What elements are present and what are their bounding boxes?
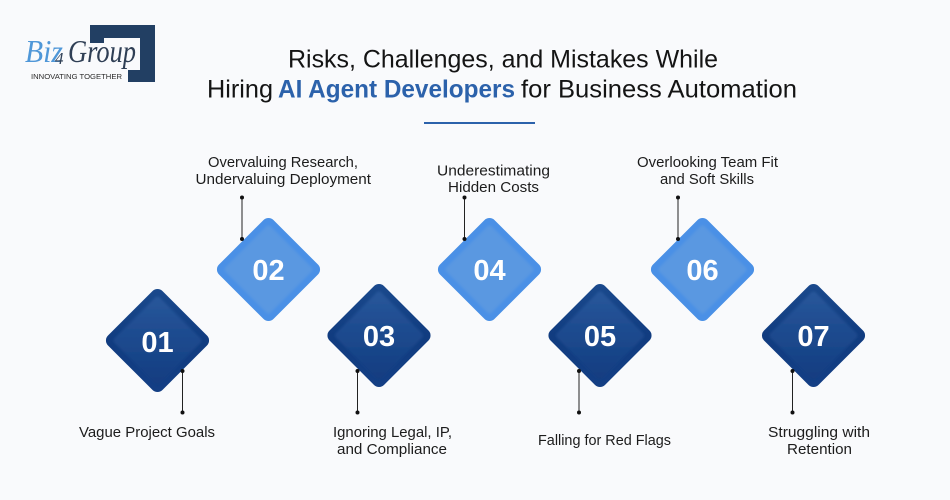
step 06: Overlooking Team Fit and Soft Skills: 06: [686, 255, 719, 287]
step 06: Overlooking Team Fit and Soft Skills: and Soft Skills: [660, 172, 754, 188]
title: for Business Automation: [521, 76, 797, 104]
step 03: Ignoring Legal, IP, and Compliance: 03: [363, 321, 395, 353]
step 05: Falling for Red Flags: Falling for Red Flags: [538, 433, 671, 449]
step 03: Ignoring Legal, IP, and Compliance: [325, 281, 452, 458]
step 01: Vague Project Goals: [79, 286, 215, 441]
step 05: Falling for Red Flags: [538, 281, 671, 449]
step 02: Overvaluing Research, Undervaluing Deployment: [196, 155, 371, 324]
step 07: Struggling with Retention: [759, 281, 870, 458]
step 07: Struggling with Retention: Struggling with: [768, 425, 870, 441]
step 04: Underestimating Hidden Costs: Underestimating: [437, 164, 550, 180]
step 06: Overlooking Team Fit and Soft Skills: [637, 155, 778, 324]
title: [207, 46, 797, 104]
title: Risks, Challenges, and Mistakes While: [288, 46, 718, 74]
logo: Biz4Group: Group: [68, 33, 136, 69]
step 06: Overlooking Team Fit and Soft Skills: Overlooking Team Fit: [637, 155, 778, 171]
step 01: Vague Project Goals: 01: [141, 327, 174, 359]
step 04: Underestimating Hidden Costs: [435, 164, 550, 324]
logo: Biz4Group: 4: [55, 49, 64, 68]
logo: Biz4Group: INNOVATING TOGETHER: [31, 72, 123, 81]
step 04: Underestimating Hidden Costs: 04: [473, 255, 506, 287]
title underline: [424, 122, 535, 124]
logo: Biz4Group: [25, 25, 155, 82]
logo: Biz4Group: Biz: [25, 33, 64, 69]
step 07: Struggling with Retention: 07: [797, 321, 830, 353]
step 05: Falling for Red Flags: 05: [584, 321, 616, 353]
step 02: Overvaluing Research, Undervaluing Deployment: Overvaluing Research,: [208, 155, 358, 171]
step 02: Overvaluing Research, Undervaluing Deployment: 02: [252, 255, 285, 287]
title: Hiring: [207, 76, 273, 104]
step 03: Ignoring Legal, IP, and Compliance: and Compliance: [337, 442, 447, 458]
step 07: Struggling with Retention: Retention: [787, 442, 852, 458]
step 01: Vague Project Goals: Vague Project Goals: [79, 425, 215, 441]
step 02: Overvaluing Research, Undervaluing Deployment: Undervaluing Deployment: [196, 172, 371, 188]
step 04: Underestimating Hidden Costs: Hidden Costs: [448, 180, 539, 196]
step 03: Ignoring Legal, IP, and Compliance: Ignoring Legal, IP,: [333, 425, 452, 441]
title: AI Agent Developers: [278, 76, 515, 104]
